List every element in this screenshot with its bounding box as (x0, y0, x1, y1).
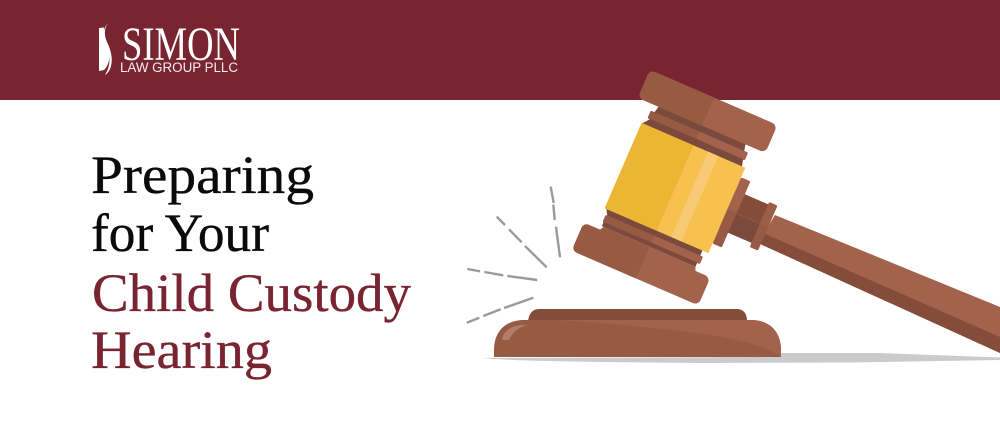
logo subtitle: LAW GROUP PLLC (120, 60, 238, 75)
top collars (642, 102, 751, 167)
sound block (494, 309, 781, 357)
sound block top plate (528, 309, 747, 321)
logo icon (99, 23, 112, 75)
handle ring (750, 202, 777, 251)
heading line: Child Custody: Child Custody (92, 263, 411, 323)
sound block glint (502, 325, 528, 340)
bottom gavel face (572, 223, 710, 305)
gavel (572, 70, 1000, 353)
heading (91, 145, 411, 380)
sound block highlight (557, 320, 781, 357)
gavel neck (718, 190, 769, 243)
impact lines (467, 187, 560, 323)
heading line: for Your: for Your (91, 203, 269, 263)
sound block body (494, 320, 781, 357)
heading line: Hearing: Hearing (91, 320, 272, 380)
bottom collars (597, 208, 705, 272)
yellow barrel (605, 123, 745, 253)
gavel head (572, 70, 807, 319)
barrel highlight stripe (671, 152, 718, 241)
gavel handle (758, 215, 1000, 353)
heading line: Preparing: Preparing (91, 145, 314, 205)
logo wordmark: SIMON (122, 18, 240, 71)
top gavel face (638, 70, 777, 153)
logo: Simon Law Group PLLC (99, 18, 240, 75)
header band (0, 0, 1000, 100)
barrel ring (713, 177, 750, 247)
sound block shadow (483, 353, 1000, 363)
